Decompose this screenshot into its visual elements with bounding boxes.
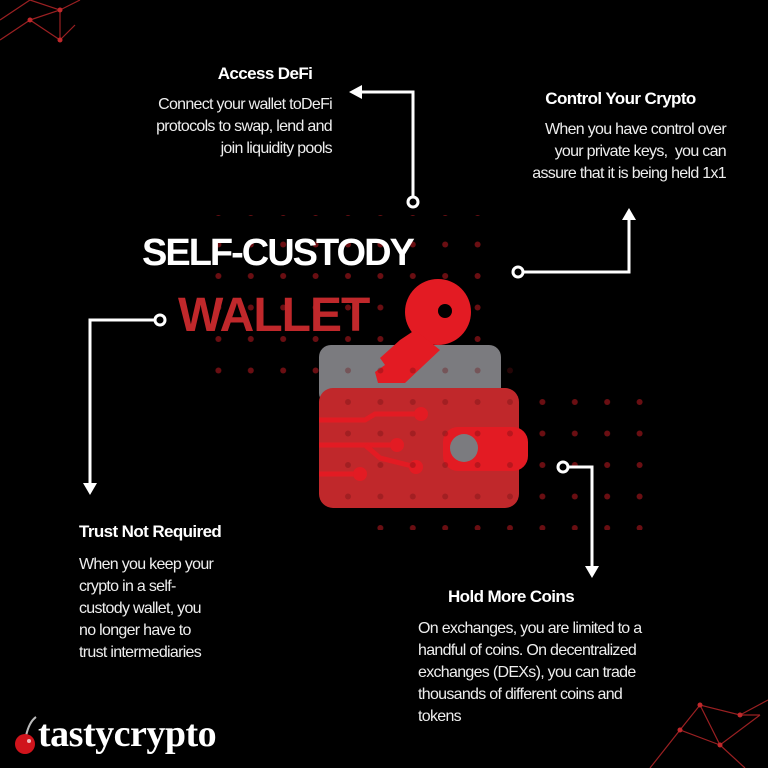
panel: trust <box>79 522 221 661</box>
title: SELF-CUSTODY <box>142 232 413 274</box>
heading: Hold More Coins <box>448 587 574 606</box>
text: On exchanges, you are limited to a <box>418 620 641 637</box>
heading: Access DeFi <box>218 64 312 83</box>
text: Connect your wallet toDeFi <box>158 96 332 113</box>
text: handful of coins. On decentralized <box>418 642 636 659</box>
panel: control <box>532 89 726 182</box>
text <box>532 121 726 182</box>
text: join liquidity pools <box>221 140 332 157</box>
panel: hold <box>418 587 642 725</box>
subtitle: WALLET <box>178 289 369 342</box>
logo: tastycrypto <box>38 713 216 755</box>
text: exchanges (DEXs), you can trade <box>418 664 636 681</box>
text <box>418 620 642 725</box>
text: crypto in a self- <box>79 578 176 595</box>
panel: access defi <box>156 64 332 157</box>
text: custody wallet, you <box>79 600 201 617</box>
text: protocols to swap, lend and <box>156 118 332 135</box>
text: no longer have to <box>79 622 191 639</box>
heading: Control Your Crypto <box>545 89 696 108</box>
text: When you keep your <box>79 556 213 573</box>
text: assure that it is being held 1x1 <box>532 165 726 182</box>
text: When you have control over <box>545 121 726 138</box>
text <box>156 96 332 157</box>
text <box>79 556 214 661</box>
text: thousands of different coins and <box>418 686 622 703</box>
text: your private keys, you can <box>555 143 726 160</box>
text: trust intermediaries <box>79 644 201 661</box>
text: tokens <box>418 708 461 725</box>
heading: Trust Not Required <box>79 522 221 541</box>
